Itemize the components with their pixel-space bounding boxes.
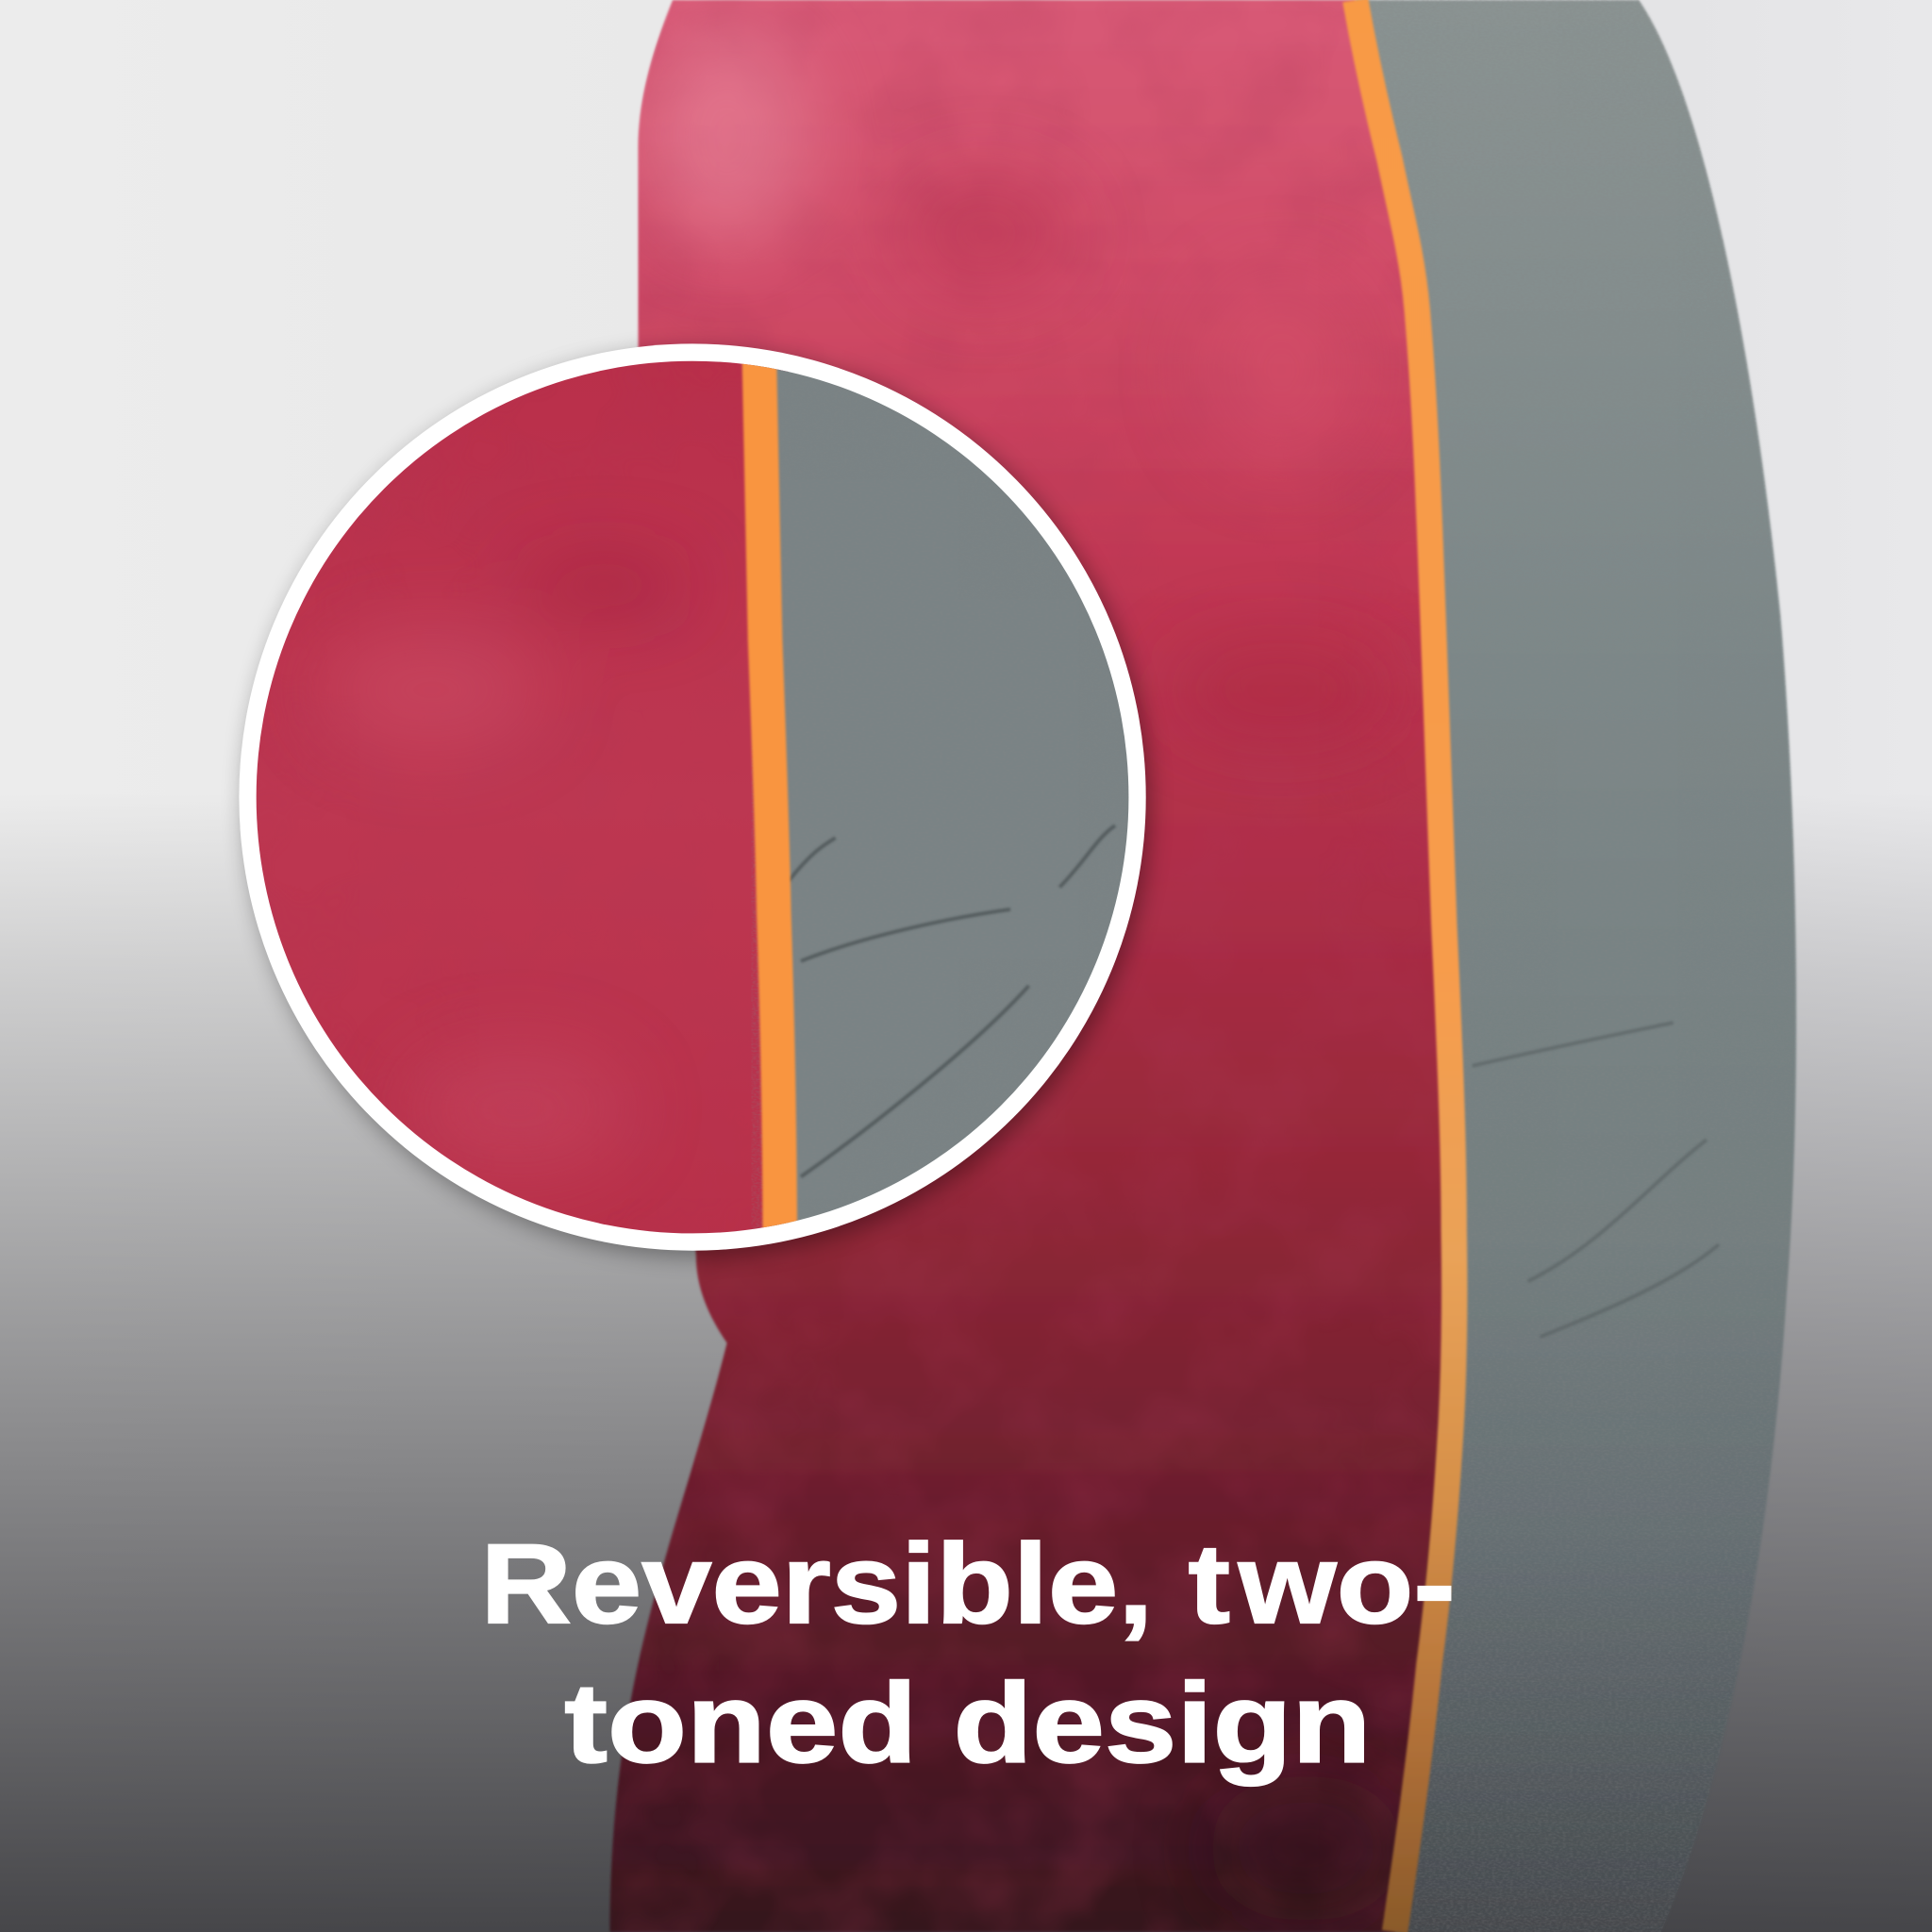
grey weave texture [1387,0,1793,1932]
pillow grey side [1356,0,1796,1932]
headline line 2: toned design [564,1660,1371,1787]
pillow red side [610,0,1455,1932]
inset mottling [234,345,776,1244]
inset creases [789,825,1115,1176]
headline line 1: Reversible, two- [480,1520,1456,1647]
headline [480,1520,1456,1787]
inset red fabric [234,345,789,1257]
inset grey weave [751,765,762,1228]
orange piping [1356,0,1455,1932]
fabric blotches [641,25,1405,1923]
circle shadow [244,350,1151,1257]
zoom circle inset [234,343,1158,1257]
inset orange piping [759,345,780,1257]
red velvet mottling [604,0,1466,1932]
inset grey fabric [753,365,1128,1226]
white ring [239,343,1146,1251]
grey seam creases [1473,1023,1719,1337]
pillow [604,0,1808,1932]
